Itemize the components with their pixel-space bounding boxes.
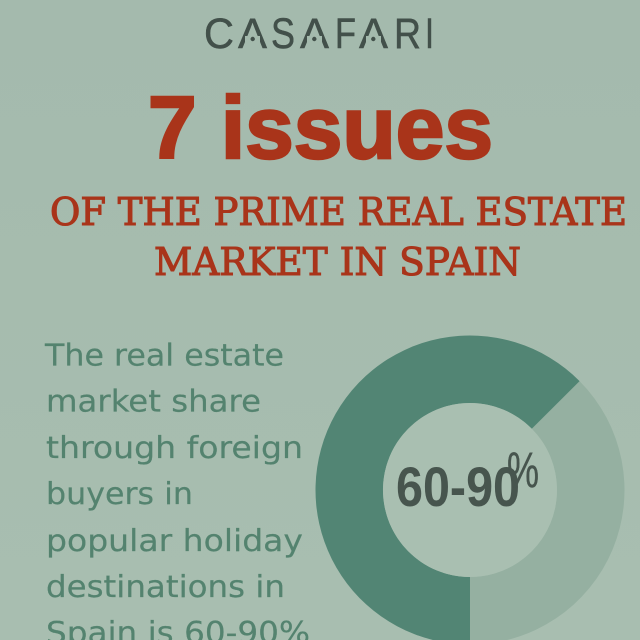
- logo: CASAFARI: A: [238, 10, 267, 58]
- logo: CASAFARI: R: [394, 10, 421, 58]
- text block: market share description: The real estate: [44, 338, 284, 374]
- logo: CASAFARI: F: [335, 10, 356, 58]
- text block: market share description: through foreign: [46, 431, 303, 466]
- logo: CASAFARI: I: [425, 10, 434, 58]
- text block: market share description: [44, 338, 310, 640]
- subtitle: [50, 190, 627, 284]
- subtitle: MARKET IN SPAIN: [154, 240, 521, 284]
- logo: CASAFARI: A: [359, 10, 388, 58]
- logo: CASAFARI: S: [271, 10, 295, 58]
- text block: market share description: destinations in: [46, 570, 285, 605]
- donut value: 60-90: 60-90: [396, 455, 520, 518]
- donut centre hole: [383, 403, 557, 577]
- donut value: percent sign: %: [507, 442, 539, 498]
- donut segment: remainder: [470, 381, 625, 640]
- donut segment: 60-90% share: [316, 336, 580, 640]
- title: 7 issues: 7 issues: [148, 78, 493, 177]
- donut chart: [316, 336, 625, 640]
- text block: market share description: buyers in: [46, 477, 193, 512]
- logo: CASAFARI: A: [300, 10, 329, 58]
- subtitle: OF THE PRIME REAL ESTATE: [50, 190, 627, 234]
- logo: CASAFARI: C: [204, 10, 234, 58]
- logo: CASAFARI: [204, 10, 434, 58]
- text block: market share description: popular holiday: [46, 524, 303, 559]
- text block: market share description: market share: [46, 384, 261, 420]
